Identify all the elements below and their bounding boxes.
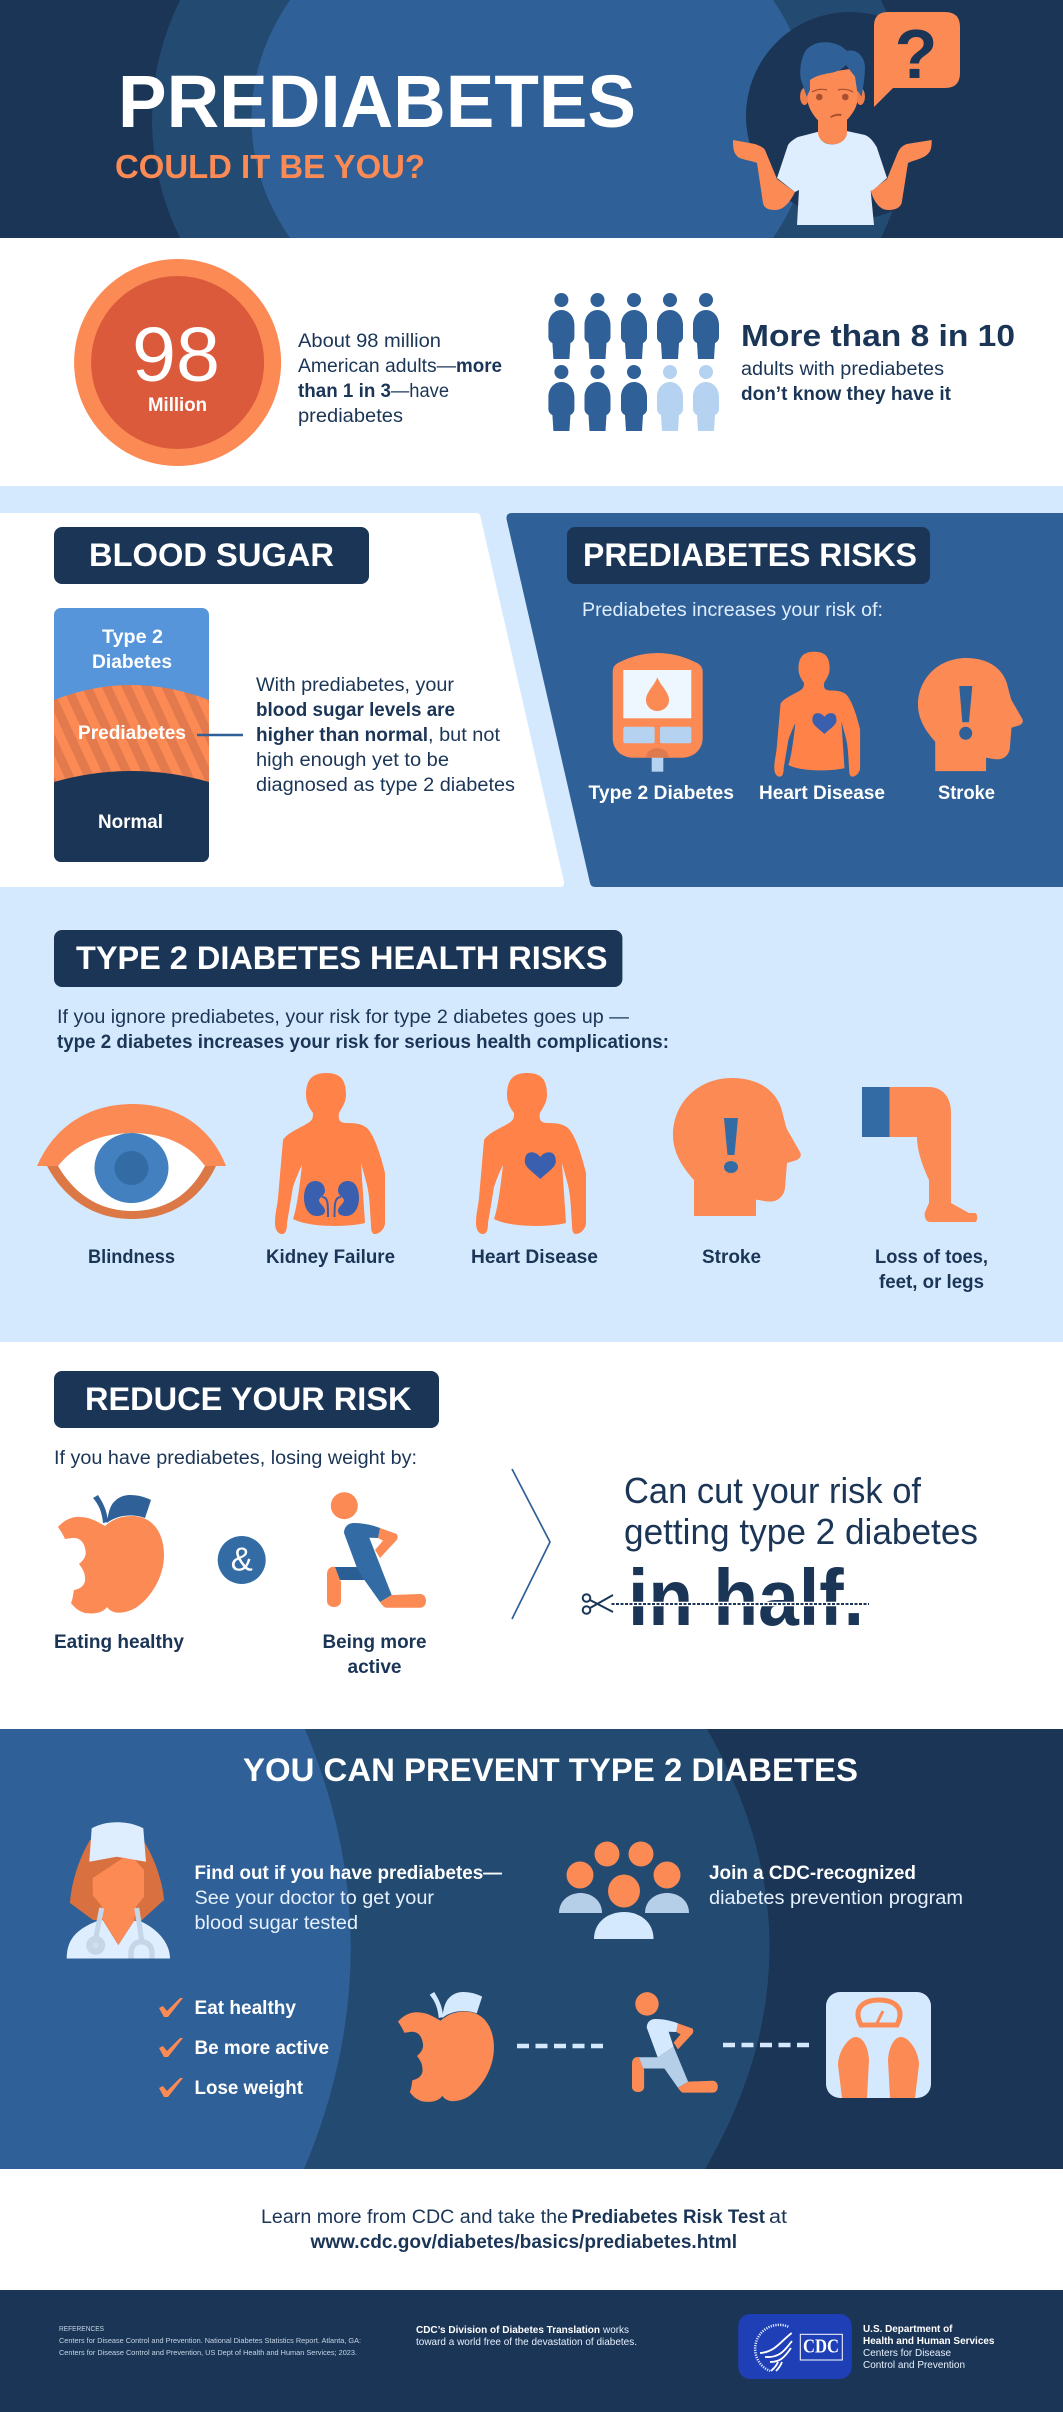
text: find out: Find out if you have prediabetes— xyxy=(194,1863,502,1884)
title: PREDIABETES xyxy=(118,60,636,143)
text: division of diabetes translation xyxy=(416,2324,637,2348)
text: can cut your risk in half: getting type 2 diabetes xyxy=(624,1511,978,1552)
text: 98 million explanation xyxy=(298,331,502,427)
icon: head with exclamation mark xyxy=(918,658,1023,771)
text: health risk intro xyxy=(57,1007,669,1053)
text: blood sugar explanation xyxy=(256,675,515,796)
icon: scissors xyxy=(583,1594,613,1614)
text: references: Centers for Disease Control and Prevention, US Dept of Health and Human Services; 2023. xyxy=(59,2348,357,2357)
panel: blood sugar xyxy=(0,513,564,887)
text: health risk intro: type 2 diabetes increases your risk for serious health complications: xyxy=(57,1032,669,1053)
labels: complication names: Blindness xyxy=(88,1247,175,1268)
icon: doctor xyxy=(67,1822,170,1958)
text: division of diabetes translation: CDC’s Division of Diabetes Translation xyxy=(416,2324,600,2336)
text: learn more call to action: Learn more from CDC and take the xyxy=(261,2207,568,2228)
text: agency names xyxy=(863,2323,995,2371)
labels: eating healthy and being active: Being more xyxy=(322,1632,426,1653)
arrow: chevron xyxy=(512,1469,550,1619)
text: join a program: diabetes prevention program xyxy=(709,1888,963,1909)
icon: leg and foot xyxy=(862,1087,977,1222)
chart: blood sugar levels bar xyxy=(54,608,243,862)
text: references: Centers for Disease Control and Prevention. National Diabetes Statistics Report. Atlanta, GA: xyxy=(59,2336,361,2345)
text: references: REFERENCES xyxy=(59,2324,104,2333)
labels: risk names: Type 2 Diabetes xyxy=(588,783,734,804)
text: more than 8 in 10: don’t know they have it xyxy=(741,384,952,405)
panel: reduce your risk xyxy=(54,1371,978,1678)
text: blood sugar explanation: blood sugar levels are xyxy=(256,700,455,721)
text: reduce intro: If you have prediabetes, losing weight by: xyxy=(54,1448,417,1469)
labels: risk names xyxy=(588,783,995,804)
checklist: Eat healthy xyxy=(194,1998,296,2019)
icon: body with heart xyxy=(774,652,860,777)
icon: glucose meter xyxy=(613,653,703,772)
text: can cut your risk in half: Can cut your risk of xyxy=(624,1470,922,1511)
icon: HHS and CDC logo xyxy=(738,2314,852,2379)
labels: eating healthy and being active: active xyxy=(348,1657,402,1678)
text: learn more call to action: at xyxy=(769,2207,788,2228)
light blue section background xyxy=(0,486,1063,1342)
text: can cut your risk in half: in half. xyxy=(628,1553,864,1642)
arrow: dashed line apple to person xyxy=(517,2044,603,2048)
text: find out: blood sugar tested xyxy=(194,1913,358,1934)
icon: person lunging xyxy=(327,1492,426,1608)
panel: footer xyxy=(0,2290,1063,2412)
text: more than 8 in 10: More than 8 in 10 xyxy=(741,318,1015,353)
text: join a program: Join a CDC-recognized xyxy=(709,1863,916,1884)
heading: type 2 diabetes health risks xyxy=(54,930,622,987)
arrow: dashed line person to scale xyxy=(723,2043,810,2047)
text: 98 million explanation: than 1 in 3 xyxy=(298,381,391,402)
icon: ampersand: & xyxy=(231,1540,253,1578)
icon: ten people, eight of them dark xyxy=(548,293,719,431)
panel: prediabetes risks xyxy=(506,513,1063,887)
panel: key statistics xyxy=(74,259,1015,466)
icon: confused person with question bubble xyxy=(733,12,960,225)
text: learn more call to action: www.cdc.gov/diabetes/basics/prediabetes.html xyxy=(309,2232,737,2253)
text: find out: See your doctor to get your xyxy=(194,1888,435,1909)
icon: bathroom scale xyxy=(826,1992,931,2098)
chart: blood sugar levels bar: Diabetes xyxy=(92,652,172,673)
text: division of diabetes translation: works xyxy=(602,2324,629,2336)
text: 98 million explanation: About 98 million xyxy=(298,331,441,352)
icon: ampersand xyxy=(218,1536,266,1584)
labels: complication names xyxy=(88,1247,988,1293)
icon: body with heart xyxy=(476,1073,586,1234)
heading: prediabetes risks: PREDIABETES RISKS xyxy=(583,537,917,573)
text: agency names: Control and Prevention xyxy=(863,2359,965,2371)
text: blood sugar explanation: higher than normal xyxy=(256,725,428,746)
text: more than 8 in 10 xyxy=(741,318,1015,405)
icon: bitten apple xyxy=(58,1495,164,1613)
labels: risk names: Heart Disease xyxy=(759,783,885,804)
icon: person lunging xyxy=(632,1992,718,2093)
panel: you can prevent type 2 diabetes xyxy=(0,1729,1063,2169)
labels: risk names: Stroke xyxy=(938,783,995,804)
icon: bitten apple xyxy=(398,1992,494,2102)
text: division of diabetes translation: toward a world free of the devastation of diabetes. xyxy=(416,2336,637,2348)
heading: blood sugar xyxy=(54,527,369,584)
text: more than 8 in 10: adults with prediabetes xyxy=(741,359,944,380)
heading: reduce your risk xyxy=(54,1371,439,1428)
panel: header xyxy=(0,0,1063,238)
icon: group of people xyxy=(559,1842,689,1939)
checklist xyxy=(159,1998,329,2099)
text: 98 million explanation: prediabetes xyxy=(298,406,403,427)
icon: HHS and CDC logo: CDC xyxy=(803,2336,839,2358)
labels: eating healthy and being active xyxy=(54,1632,426,1678)
labels: eating healthy and being active: Eating healthy xyxy=(54,1632,184,1653)
heading: blood sugar: BLOOD SUGAR xyxy=(89,537,334,573)
text: 98 million explanation: American adults— xyxy=(298,356,456,377)
text: blood sugar explanation: , but not xyxy=(428,725,501,746)
heading: reduce your risk: REDUCE YOUR RISK xyxy=(85,1381,412,1417)
text: agency names: Centers for Disease xyxy=(863,2347,951,2359)
labels: complication names: feet, or legs xyxy=(879,1272,984,1293)
icon: body with kidneys xyxy=(275,1073,385,1234)
text: health risk intro: If you ignore prediabetes, your risk for type 2 diabetes goes up — xyxy=(57,1007,629,1028)
panel: type 2 diabetes health risks xyxy=(37,930,988,1293)
icon: 98 million circle xyxy=(74,259,281,466)
text: blood sugar explanation: diagnosed as type 2 diabetes xyxy=(256,775,515,796)
text: agency names: U.S. Department of xyxy=(863,2323,953,2335)
chart: blood sugar levels bar: Normal xyxy=(98,812,163,833)
icon: 98 million circle: Million xyxy=(148,395,207,416)
heading: type 2 diabetes health risks: TYPE 2 DIABETES HEALTH RISKS xyxy=(76,940,608,976)
text: 98 million explanation: —have xyxy=(391,381,449,402)
labels: complication names: Loss of toes, xyxy=(875,1247,988,1268)
text: learn more call to action: Prediabetes Risk Test xyxy=(572,2207,766,2228)
checklist: Be more active xyxy=(194,2038,329,2059)
chart: blood sugar levels bar: Prediabetes xyxy=(78,723,186,744)
text: join a program xyxy=(709,1863,963,1909)
text: blood sugar explanation: high enough yet to be xyxy=(256,750,449,771)
checklist: Lose weight xyxy=(194,2078,304,2099)
text: references xyxy=(59,2324,361,2357)
labels: complication names: Stroke xyxy=(702,1247,761,1268)
subtitle: COULD IT BE YOU? xyxy=(115,148,425,185)
heading: prevention: YOU CAN PREVENT TYPE 2 DIABETES xyxy=(243,1752,858,1788)
icon: confused person with question bubble: ? xyxy=(895,15,937,93)
icon: 98 million circle: 98 xyxy=(132,312,220,398)
text: risk intro: Prediabetes increases your risk of: xyxy=(582,600,883,621)
text: agency names: Health and Human Services xyxy=(863,2335,995,2347)
text: 98 million explanation: more xyxy=(456,356,502,377)
labels: complication names: Heart Disease xyxy=(471,1247,598,1268)
labels: complication names: Kidney Failure xyxy=(266,1247,395,1268)
text: find out xyxy=(194,1863,502,1934)
text: learn more call to action xyxy=(261,2207,788,2253)
heading: prediabetes risks xyxy=(567,527,930,584)
text: can cut your risk in half xyxy=(612,1470,978,1642)
icon: head with exclamation mark xyxy=(673,1078,801,1216)
icon: eye xyxy=(37,1104,226,1219)
text: blood sugar explanation: With prediabetes, your xyxy=(256,675,455,696)
chart: blood sugar levels bar: Type 2 xyxy=(102,627,163,648)
